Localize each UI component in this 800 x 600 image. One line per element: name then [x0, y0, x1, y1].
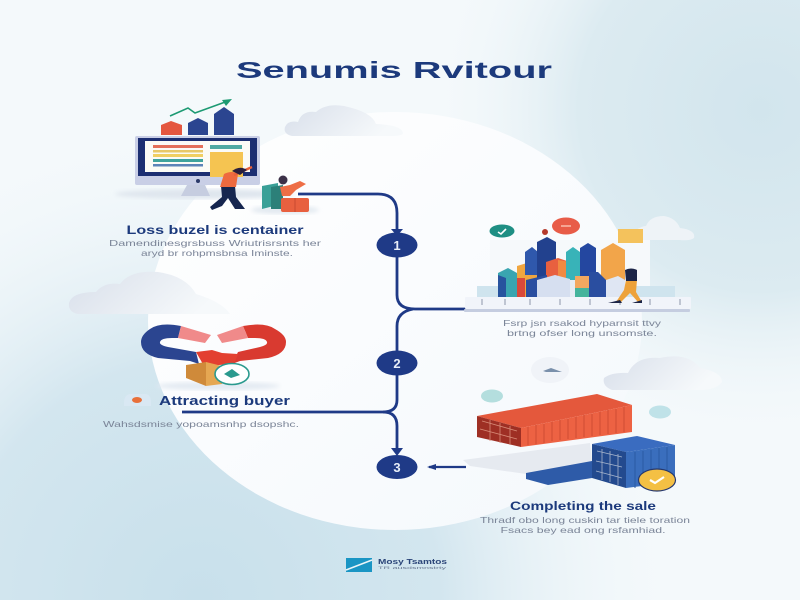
- logo text: Mosy Tsamtos: [378, 559, 447, 566]
- platform: [465, 297, 691, 309]
- buildings: [498, 229, 625, 298]
- cloud: top: [285, 105, 403, 136]
- red container: [477, 394, 632, 447]
- icon: small label badge: [124, 394, 151, 406]
- description: completing the sale: Thradf obo long cuskin tar tiele toration: [480, 515, 690, 525]
- description: right middle: Fsrp jsn rsakod hyparnsit ttvy: [503, 318, 662, 328]
- step 1 badge: 1: [393, 238, 401, 253]
- check badge: [638, 469, 676, 491]
- icon: magnet with box: [141, 325, 286, 390]
- person: [210, 167, 252, 210]
- arrowheads: [391, 229, 436, 470]
- monitor: [135, 136, 260, 196]
- process line: [182, 194, 466, 467]
- description: right middle: brtng ofser long unsomste.: [507, 328, 657, 338]
- cloud: top right: [635, 216, 694, 240]
- step 3 badge: 3: [393, 460, 401, 475]
- bars above monitor: [161, 107, 234, 135]
- description: attracting buyer: Wahsdsmise yopoamsnhp dsopshc.: [103, 419, 299, 429]
- logo: [346, 558, 447, 572]
- floor shadow: [463, 443, 592, 474]
- description: step 1: [109, 238, 321, 258]
- description: completing the sale: [480, 515, 690, 535]
- heading: completing the sale: Completing the sale: [510, 501, 656, 513]
- icon: dots and plane: [481, 357, 671, 418]
- logo mark: [346, 558, 372, 572]
- step 2 badge: [376, 350, 418, 376]
- text block: completing the sale: [480, 501, 690, 535]
- description: completing the sale: Fsacs bey ead ong rsfamhiad.: [500, 525, 666, 535]
- heading: step 1: Loss buzel is centainer: [126, 225, 304, 237]
- step 3 badge: [376, 455, 418, 479]
- boxes and helper: [262, 176, 309, 212]
- text block: step 1: [109, 225, 321, 258]
- description: step 1: Damendinesgrsbuss Wriutrisrsnts her: [109, 238, 321, 248]
- icon: city skyline chart with walking person: [464, 218, 691, 312]
- blue container: [592, 436, 675, 488]
- badges: [490, 218, 643, 243]
- description: step 1: aryd br rohpmsbnsa Iminste.: [141, 248, 293, 258]
- title: Senumis Rvitour: [236, 57, 552, 83]
- flat blue container: [526, 461, 592, 485]
- person: [608, 268, 642, 303]
- cloud: left: [69, 272, 230, 314]
- cloud: lower right: [604, 356, 722, 390]
- magnet: [141, 325, 199, 364]
- heading: attracting buyer: Attracting buyer: [159, 393, 290, 408]
- logo text: [378, 559, 447, 570]
- icon: monitor with bar chart and people: [115, 99, 319, 214]
- trend arrow: [170, 99, 232, 116]
- box: [186, 362, 206, 386]
- light backing: [490, 240, 650, 290]
- description: right middle: [503, 318, 662, 338]
- step 2 badge: 2: [393, 356, 401, 371]
- logo text: TR ausdsmnstrty: [378, 565, 446, 570]
- step 1 badge: [376, 232, 418, 258]
- icon: shipping containers: [463, 394, 676, 491]
